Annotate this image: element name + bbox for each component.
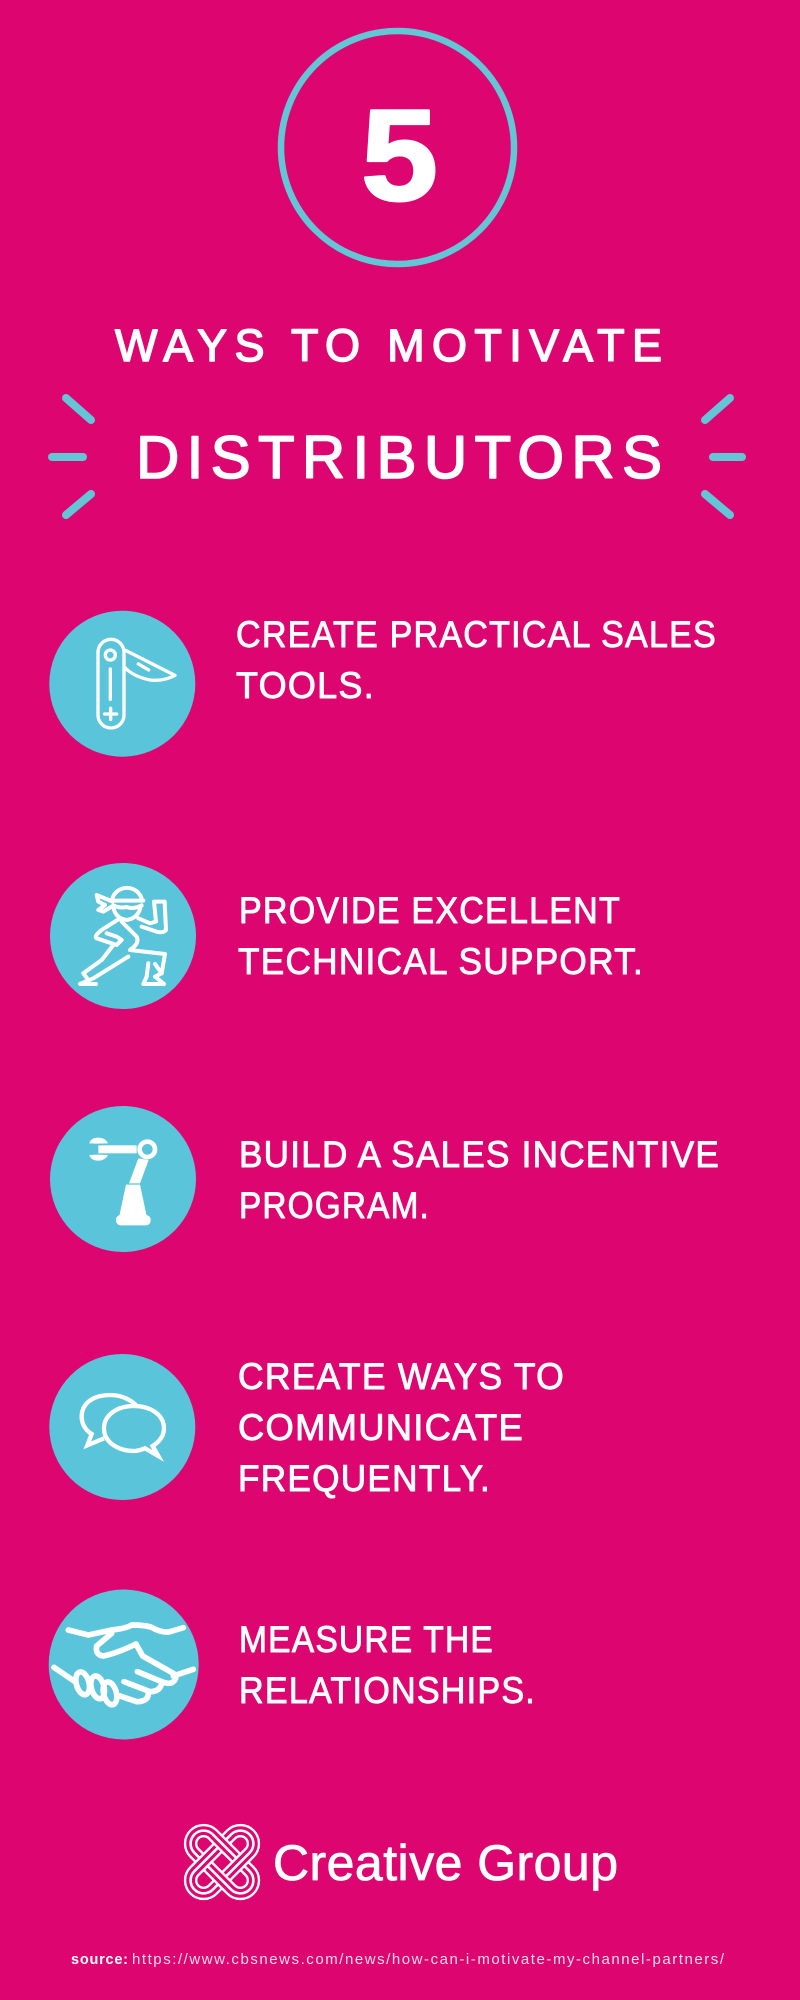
icon: pocket knife — [98, 639, 175, 728]
text: FREQUENTLY. — [238, 1458, 491, 1499]
text — [239, 1619, 536, 1711]
text: PROVIDE EXCELLENT — [239, 890, 621, 931]
item 5: measure relationships — [49, 1590, 536, 1740]
icon: robot arm — [89, 1138, 155, 1225]
icon: ninja — [80, 888, 166, 984]
icon: handshake — [54, 1625, 193, 1706]
source line: source: — [71, 1952, 128, 1968]
title: ways to motivate: WAYS TO MOTIVATE — [115, 320, 662, 371]
text: MEASURE THE — [239, 1619, 494, 1660]
logo mark — [184, 1824, 260, 1900]
source line: https://www.cbsnews.com/news/how-can-i-motivate-my-channel-partners/ — [132, 1951, 725, 1968]
item 2: technical support — [50, 863, 644, 1009]
text: TOOLS. — [236, 665, 375, 706]
number badge — [281, 31, 514, 264]
icon: chat bubbles — [82, 1395, 164, 1456]
item 1: practical sales tools — [49, 611, 717, 757]
item 4: communicate frequently — [49, 1354, 565, 1500]
text: CREATE PRACTICAL SALES — [236, 614, 717, 655]
item 3: incentive program — [50, 1106, 720, 1252]
rays: left — [52, 398, 91, 515]
text — [239, 1134, 720, 1226]
number badge: 5 — [361, 82, 438, 228]
title: distributors: DISTRIBUTORS — [136, 424, 662, 491]
text: COMMUNICATE — [238, 1407, 524, 1448]
text: PROGRAM. — [239, 1185, 430, 1226]
text: RELATIONSHIPS. — [239, 1670, 536, 1711]
text: CREATE WAYS TO — [238, 1356, 565, 1397]
text — [236, 614, 717, 706]
text: BUILD A SALES INCENTIVE — [239, 1134, 720, 1175]
logo wordmark: Creative Group — [273, 1835, 618, 1891]
text — [238, 890, 644, 982]
rays: right — [705, 398, 742, 515]
text — [238, 1356, 565, 1499]
text: TECHNICAL SUPPORT. — [238, 941, 644, 982]
